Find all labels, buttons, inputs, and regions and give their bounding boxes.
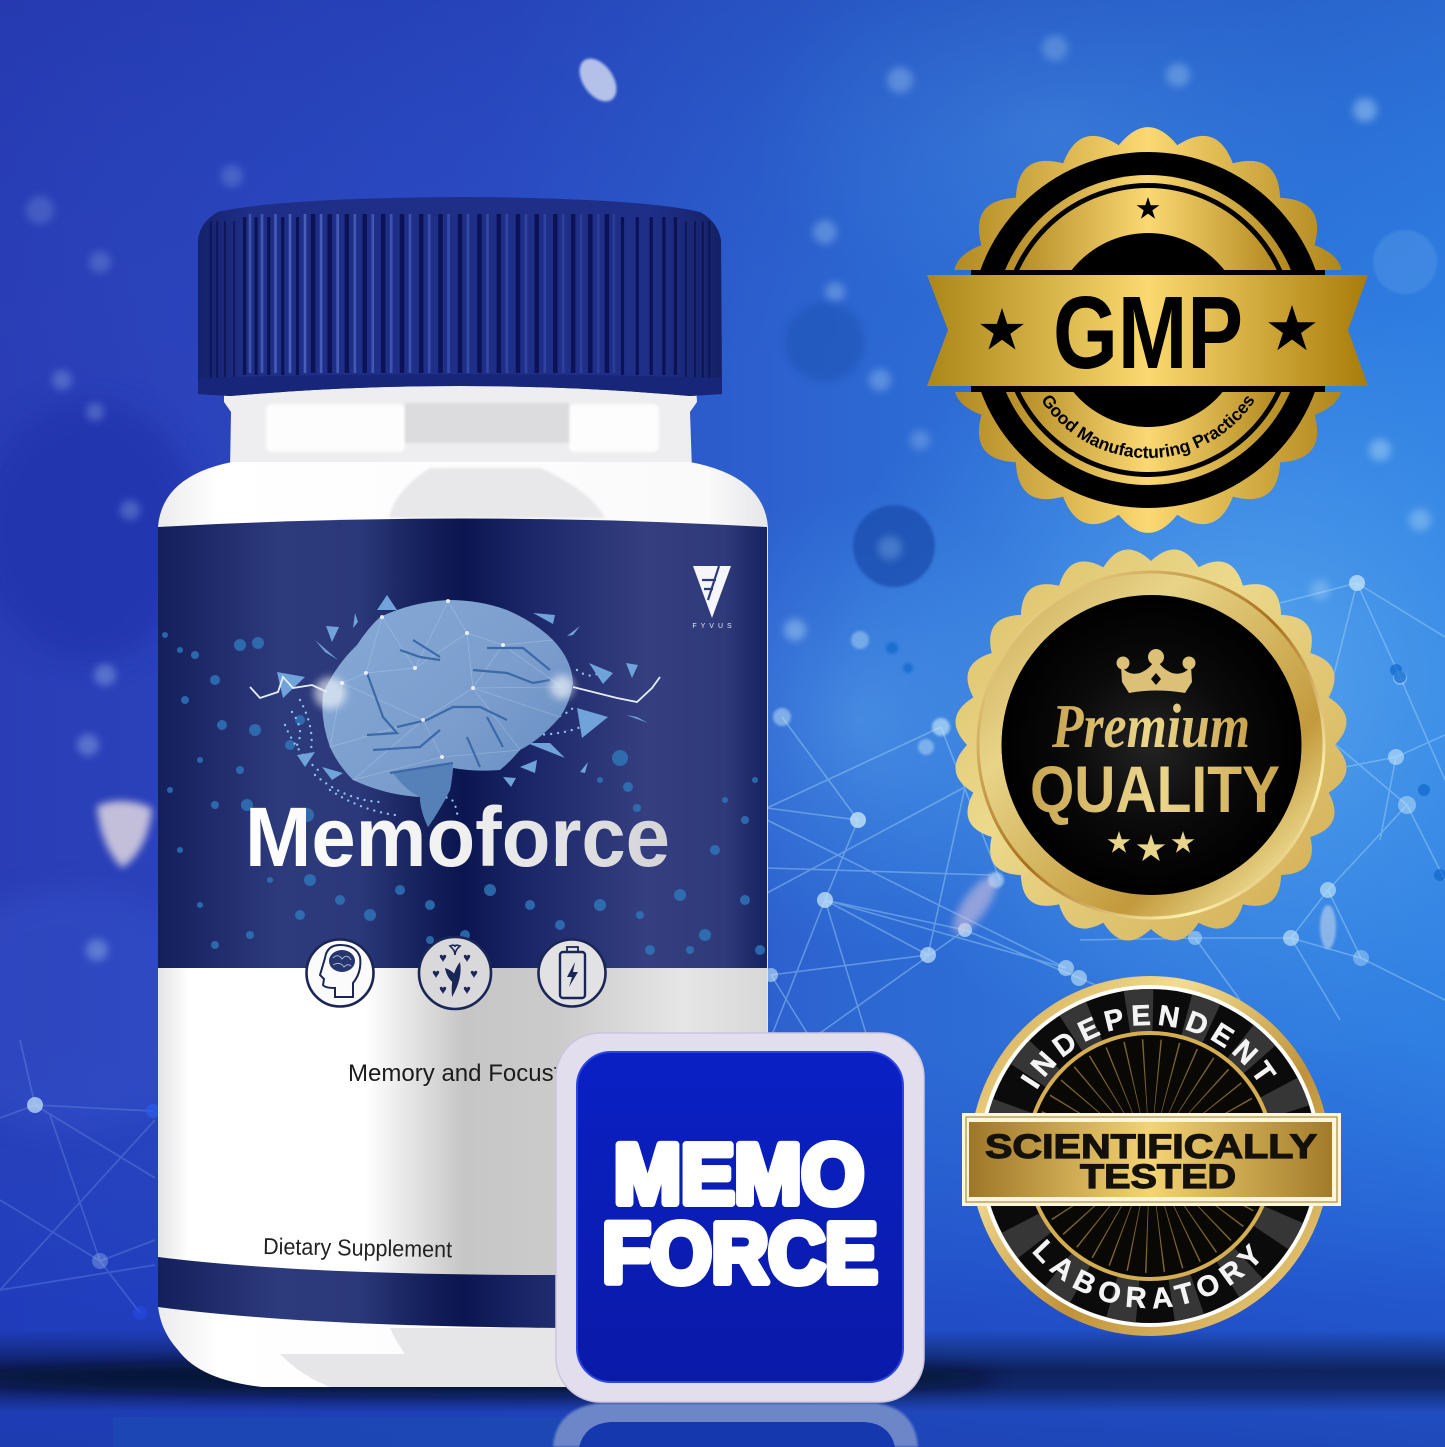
gold seal: [945, 127, 1351, 533]
three stars: [1108, 831, 1194, 861]
icon: wellbeing figure: ♥: [463, 950, 471, 965]
rings: [970, 152, 1326, 508]
brain cerebellum: [393, 763, 453, 827]
label claim text: Memory and Focus*: [348, 1060, 563, 1087]
scalloped edge: [956, 550, 1346, 940]
arc text: Good Manufacturing Practices: [1043, 396, 1254, 458]
icon: wellbeing figure: ♥: [470, 966, 478, 981]
bottle body: [158, 462, 768, 1387]
rings: [978, 572, 1324, 918]
sunburst: [1075, 1081, 1225, 1231]
outer rings: [970, 976, 1330, 1336]
star: [1137, 197, 1159, 219]
brand logo: FYVUS: [692, 623, 736, 630]
brain shards: [277, 595, 648, 787]
brain body: [322, 600, 573, 827]
badge: Scientifically Tested: [962, 976, 1341, 1336]
icon: wellbeing figure: ♥: [463, 982, 471, 997]
banner: [962, 1113, 1341, 1206]
bottle neck: [224, 385, 697, 470]
box logo text: [602, 1127, 878, 1300]
background blurred bubbles: [97, 52, 1437, 949]
ribbon: [927, 275, 1368, 386]
badge: Premium Quality: [956, 550, 1346, 940]
GMP text: GMP: [1053, 275, 1243, 390]
cap ribs: [313, 214, 607, 373]
arc text bottom: LABORATORY: [1032, 1238, 1259, 1309]
ribbon stars: [980, 305, 1316, 350]
banner text: SCIENTIFICALLY: [985, 1128, 1317, 1166]
icon: brain illustration: [250, 595, 660, 827]
brain mesh: [330, 601, 562, 780]
product box: [556, 1033, 924, 1402]
bottle: [158, 197, 768, 1387]
bottle label: [158, 518, 767, 1328]
brain glow points: [314, 599, 574, 759]
product name: Memoforce: [245, 790, 670, 884]
icon: head with brain: [306, 940, 374, 1006]
bottle cap: [198, 197, 722, 396]
label dots: [162, 632, 765, 955]
background network lines: [767, 583, 1445, 1070]
arc text top: INDEPENDENT: [1020, 1004, 1277, 1090]
bottle shoulder highlight: [389, 468, 605, 518]
icon: wellbeing figure: ♥: [432, 966, 440, 981]
speckle clusters: [285, 670, 600, 820]
box reflection: [553, 1403, 918, 1447]
quality: QUALITY: [1030, 752, 1280, 826]
badge: GMP: [927, 127, 1368, 533]
badge: Scientifically Tested: TESTED: [1080, 1158, 1236, 1196]
icon: wellbeing figure: ♥: [439, 982, 447, 997]
icon: battery: [538, 940, 606, 1006]
brand logo: [692, 566, 736, 630]
lightning: [250, 677, 660, 702]
label supplement text: Dietary Supplement: [263, 1233, 453, 1262]
floor shadow: [0, 1330, 1445, 1447]
bottle base shading: [280, 1328, 767, 1387]
box logo text: FORCE: [602, 1206, 878, 1300]
crown: [1116, 649, 1196, 693]
icon: wellbeing figure: [419, 937, 491, 1009]
premium script: Premium: [1051, 693, 1250, 761]
box logo text: MEMO: [614, 1127, 864, 1221]
brain folds: [367, 640, 550, 773]
icon: wellbeing figure: ♥: [439, 950, 447, 965]
